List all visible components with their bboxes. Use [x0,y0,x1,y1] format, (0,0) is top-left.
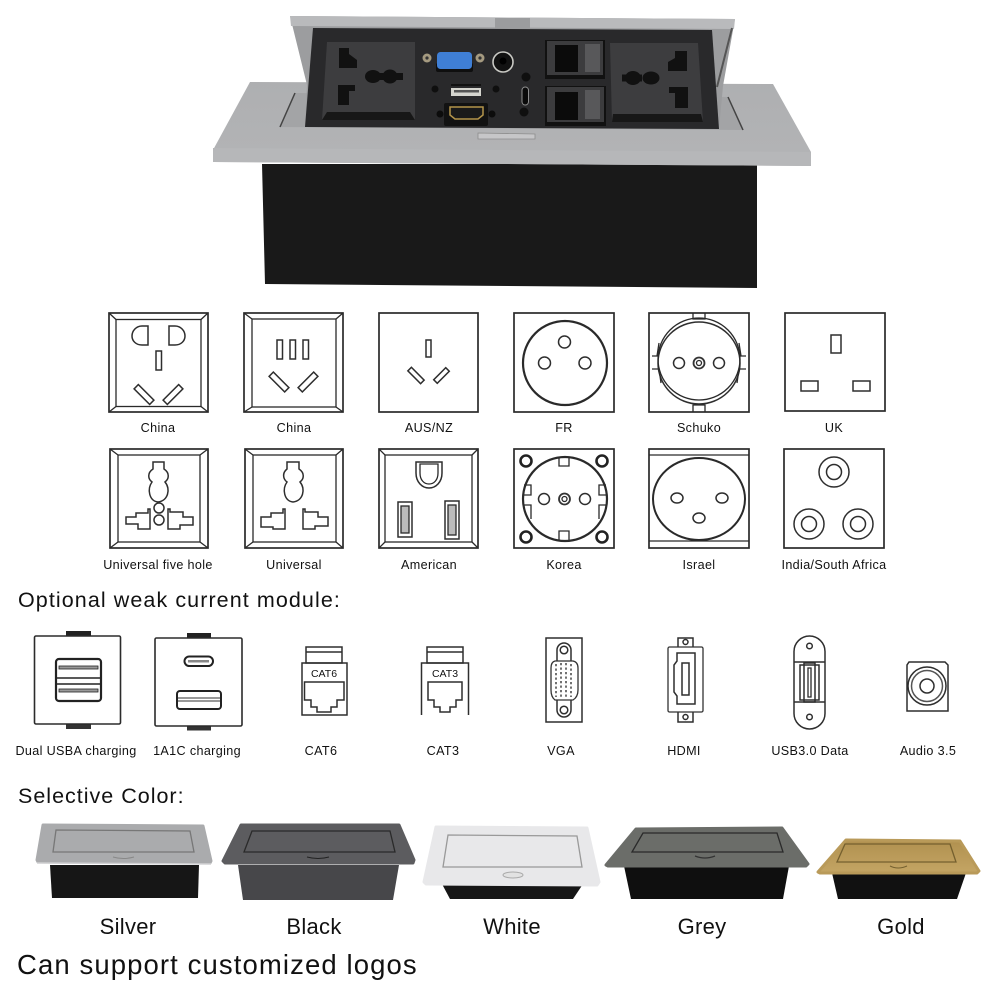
socket: FR [514,313,614,412]
label: CAT3: CAT3 [427,744,459,758]
product: gold [818,840,979,899]
label: India/South Africa: India/South Africa [781,558,887,572]
module: VGA [546,638,582,722]
socket: Israel [649,449,749,548]
socket: China five-pin [109,313,208,412]
product photo: open pop-up socket box [213,16,811,288]
label: Universal five hole: Universal five hole [103,558,213,572]
socket: Universal five hole [110,449,208,548]
module: USB3.0 data [794,636,825,729]
label: Silver: Silver [100,914,156,939]
module: CAT3 [422,647,468,715]
socket: American [379,449,478,548]
right universal socket [610,43,703,122]
socket: Universal [245,449,343,548]
label: Israel: Israel [683,558,715,572]
HDMI port [436,103,496,126]
label: Korea: Korea [546,558,582,572]
USB-C port [520,72,530,116]
socket: Schuko [649,313,749,412]
product: grey [606,828,808,899]
RJ45 modules [545,40,606,126]
module: audio 3.5 [907,662,948,711]
label: HDMI: HDMI [667,744,701,758]
label: Audio 3.5: Audio 3.5 [900,744,956,758]
label: VGA: VGA [547,744,575,758]
module: CAT6: CAT6 [311,668,337,680]
label: American: American [401,558,457,572]
socket: UK [785,313,885,411]
footer note: customized logos: Can support customized logos [17,949,418,980]
product: silver [37,825,211,898]
product: white [424,827,599,899]
USB-A port [432,84,500,96]
product: black [223,825,414,900]
label: Dual USBA charging: Dual USBA charging [15,744,137,758]
silver top plate [213,82,811,166]
label: Black: Black [286,914,342,939]
tilted lid [290,16,735,129]
label: Universal: Universal [266,558,322,572]
module: dual USB-A charging [34,631,120,729]
audio jack [493,52,513,72]
label: White: White [483,914,541,939]
label: Gold: Gold [877,914,925,939]
socket: China three-slot [244,313,343,412]
socket: India/South Africa [784,449,884,548]
module: CAT3: CAT3 [432,668,458,680]
label: FR: FR [555,421,573,435]
label: USB3.0 Data: USB3.0 Data [771,744,849,758]
label: Schuko: Schuko [677,421,721,435]
label: UK: UK [825,421,843,435]
module: CAT6 [302,647,347,715]
label: Grey: Grey [678,914,726,939]
socket: AUS/NZ [379,313,478,412]
label: 1A1C charging: 1A1C charging [153,744,241,758]
label: AUS/NZ: AUS/NZ [405,421,453,435]
VGA port [422,52,484,72]
black face plate [305,28,719,129]
label: China: China [277,421,311,435]
label: CAT6: CAT6 [305,744,337,758]
socket: Korea [514,449,614,548]
black housing [262,164,757,288]
heading: selective color: Selective Color: [18,784,185,808]
module: 1A1C charging [155,633,242,730]
label: China: China [141,421,175,435]
heading: optional weak current module: Optional weak current module: [18,588,341,612]
left universal socket [322,42,415,120]
module: HDMI [668,638,703,722]
